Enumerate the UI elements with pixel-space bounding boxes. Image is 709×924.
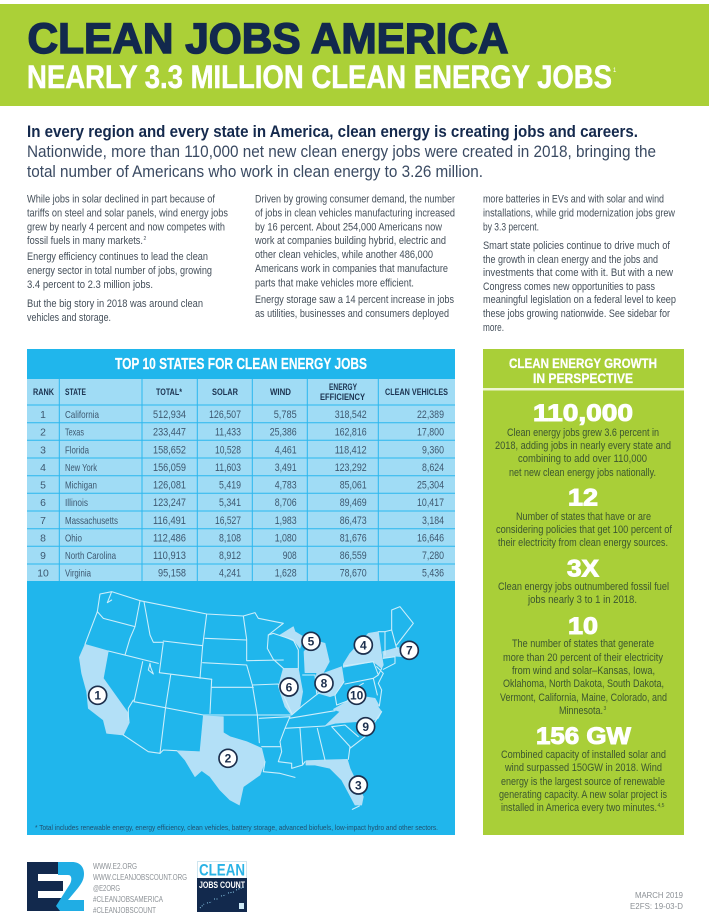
table rows: 4,241 [219,568,241,580]
table rows: 3,491 [275,462,297,474]
stat: 110,000: Clean energy jobs grew 3.6 percent in [507,427,659,439]
table rows: Illinois [65,498,88,509]
table rows: 6 [40,498,46,509]
intro text: In every region and every state in America, clean energy is creating jobs and careers. [27,123,638,141]
table rows: 7 [40,516,46,527]
stat: 110,000: combining to add over 110,000 [518,453,647,465]
stat: 156 GW [499,723,667,814]
table rows: 86,559 [340,550,367,562]
body column 1: But the big story in 2018 was around clean [27,298,203,310]
table rows: 9,360 [422,444,444,456]
table rows: 116,491 [153,515,186,527]
state number markers [89,632,418,794]
state number markers: 2 [225,752,232,766]
contact links: WWW.E2.ORG [93,861,137,871]
table rows: 2 [40,428,46,439]
table rows: 123,292 [335,462,367,474]
table rows: 1,983 [275,515,297,527]
stat: 110,000 [495,400,671,479]
body column 2 [254,194,455,320]
table rows: 5,436 [422,568,444,580]
table rows: 5,785 [274,409,297,421]
table rows: 10,528 [215,444,241,456]
logo: E2 [27,862,84,911]
state number markers: 1 [94,689,101,703]
state number markers: 9 [362,720,369,734]
title: CLEAN JOBS AMERICA [28,15,508,63]
body column 3: more. [483,322,504,334]
contact links: WWW.CLEANJOBSCOUNT.ORG [93,872,187,882]
header banner [0,4,709,106]
body column 1: tariffs on steel and solar panels, wind energy jobs [27,208,229,220]
body column 2: of jobs in clean vehicles manufacturing increased [255,208,455,220]
state number markers: 3 [355,778,362,792]
US map [79,592,418,809]
table rows: Ohio [65,533,82,544]
state number markers: 8 [321,677,328,691]
table rows [37,409,444,580]
table rows: North Carolina [65,551,116,562]
table rows: 95,158 [158,568,186,580]
intro text: total number of Americans who work in clean energy to 3.26 million. [27,163,483,181]
contact links: #CLEANJOBSAMERICA [93,894,163,904]
state number markers: 4 [360,638,367,652]
stat: 156 GW: 4,5 [658,803,665,809]
body column 2: other clean vehicles, while another 486,000 [255,249,433,261]
table rows: New York [65,463,98,474]
table rows: 16,646 [417,532,444,544]
stat: 156 GW: installed in America every two minutes. [501,802,657,814]
stat: 3X: 3X [567,556,599,583]
stat: 10: The number of states that generate [512,638,654,650]
date and document code [630,890,683,911]
table rows: 78,670 [340,568,367,580]
table rows: 156,059 [153,462,186,474]
table rows: 8,912 [219,550,241,562]
stat: 110,000: 110,000 [533,400,633,427]
table rows: 123,247 [153,497,186,509]
body column 2: by 16 percent. About 254,000 Americans now [255,222,442,234]
table header: EFFICIENCY [320,392,365,403]
table rows: 25,304 [417,480,444,492]
logo: clean jobs count: JOBS COUNT [199,880,245,891]
map footnote: * Total includes renewable energy, energy efficiency, clean vehicles, battery storage, advanced biofuels, low-impact hydro and other sectors. [35,823,438,832]
table rows: 10,417 [417,497,444,509]
body column 1: grew by nearly 4 percent and now competes with [27,222,225,234]
panel: top 10 states [27,349,455,835]
stat: 156 GW: 156 GW [536,723,631,750]
intro text [27,123,656,181]
stat: 10: more than 20 percent of their electricity [503,652,664,664]
table title: TOP 10 STATES FOR CLEAN ENERGY JOBS [115,356,367,373]
stat: 3X: Clean energy jobs outnumbered fossil fuel [498,581,669,593]
footnote mark: 1 [613,68,617,74]
subtitle: NEARLY 3.3 MILLION CLEAN ENERGY JOBS [27,59,612,95]
stat: 12: 12 [568,485,598,512]
stat: 110,000: net new clean energy jobs nationally. [509,467,656,479]
stat: 12: considering policies that get 100 percent of [496,524,673,536]
table rows: 3 [40,445,46,456]
state number markers: 10 [350,689,364,703]
state borders [85,592,413,809]
state number markers: 7 [406,644,413,658]
body column 2: Americans work in companies that manufacture [255,263,448,275]
table rows: 126,507 [209,409,241,421]
table rows: Florida [65,445,89,456]
table rows: 5 [40,480,46,492]
table rows: 11,433 [215,427,241,439]
table rows: 22,389 [417,409,444,421]
table rows: 110,913 [153,550,186,562]
intro text: Nationwide, more than 110,000 net new clean energy jobs were created in 2018, bringing the [27,143,656,161]
contact links: @E2ORG [93,883,120,893]
date and document code: MARCH 2019 [635,890,683,900]
table rows: 3,184 [422,515,444,527]
table header: TOTAL* [156,387,182,398]
table header [33,382,448,403]
table rows: Virginia [65,569,91,580]
table rows: 8 [40,533,46,544]
table rows: 8,706 [275,497,297,509]
table rows: 8,108 [219,532,241,544]
table rows: 85,061 [340,480,367,492]
table rows: California [65,410,99,421]
table rows: 7,280 [422,550,444,562]
body column 1: vehicles and storage. [27,312,111,324]
table rows: 162,816 [335,427,367,439]
sidebar heading: IN PERSPECTIVE [533,371,633,386]
stat: 10: 10 [568,613,598,640]
table header: CLEAN VEHICLES [385,387,448,398]
table rows: 5,341 [219,497,241,509]
body column 1: Energy efficiency continues to lead the clean [27,251,208,263]
table rows: 10 [37,569,49,580]
table rows: 1,080 [275,532,297,544]
state number markers: 6 [286,680,293,694]
table rows: 5,419 [219,480,241,492]
body column 2: parts that make vehicles more efficient. [255,278,414,290]
table rows: 25,386 [270,427,297,439]
stat: 156 GW: wind surpassed 150GW in 2018. Wind [504,762,662,774]
body column 3 [483,194,676,334]
stat: 156 GW: Combined capacity of installed solar and [501,749,666,761]
stat: 156 GW: generating capacity. A new solar project is [499,789,667,801]
body column 1: 3.4 percent to 2.3 million jobs. [27,279,153,291]
table header: RANK [33,387,54,398]
table rows: 17,800 [417,427,444,439]
contact links [93,861,187,915]
logo: clean jobs count: CLEAN [199,860,245,880]
stat: 12: their electricity from clean energy sources. [498,537,668,549]
stat: 10: 3 [604,706,606,712]
table rows: 8,624 [422,462,444,474]
body column 2: Energy storage saw a 14 percent increase in jobs [255,294,455,306]
stat: 10: Oklahoma, North Dakota, South Dakota, [503,678,664,690]
table rows: 126,081 [153,480,186,492]
table header: WIND [270,387,291,398]
contact links: #CLEANJOBSCOUNT [93,905,157,915]
table header: ENERGY [329,382,357,393]
body column 3: the growth in clean energy and the jobs and [483,254,658,266]
date and document code: E2FS: 19-03-D [630,901,683,911]
table rows: 89,469 [340,497,367,509]
stat: 12 [496,485,673,549]
stat: 12: Number of states that have or are [516,511,651,523]
body column 3: installations, while grid modernization jobs grew [483,208,675,220]
body column 1: energy sector in total number of jobs, growing [27,265,212,277]
table rows: Texas [65,428,84,439]
table rows: 1 [40,410,46,421]
table rows: Michigan [65,480,97,492]
body column 3: Smart state policies continue to drive much of [483,240,671,252]
table rows: 908 [283,550,297,562]
table rows: 4,461 [275,444,297,456]
body column 2: as utilities, businesses and consumers deployed [255,308,449,320]
state number markers: 5 [308,635,315,649]
stat: 10: from wind and solar–Kansas, Iowa, [512,665,655,677]
body column 1 [27,194,229,324]
panel: clean energy growth in perspective [483,349,684,835]
stat: 10: Minnesota. [559,705,603,717]
table rows: 16,527 [215,515,241,527]
table rows: 4,783 [275,480,297,492]
table rows: 158,652 [153,444,186,456]
body column 1: fossil fuels in many markets. [27,235,143,247]
sidebar heading [509,356,657,386]
body column 3: investments that come with it. But with a new [483,267,673,279]
table header: SOLAR [212,387,238,398]
logo: clean jobs count [197,860,247,912]
body column 2: Driven by growing consumer demand, the number [255,194,455,206]
body column 3: more batteries in EVs and with solar and wind [483,194,664,206]
stat: 10: Vermont, California, Maine, Colorado, and [500,692,667,704]
body column 1: While jobs in solar declined in part because of [27,194,216,206]
body column 3: these jobs growing nationwide. See sidebar for [483,308,670,320]
table rows: 9 [40,551,46,562]
stat: 110,000: 2018, adding jobs in nearly every state and [495,440,671,452]
body column 3: Congress comes new opportunities to pass [483,281,655,293]
stat: 10 [500,613,667,717]
body column 3: by 3.3 percent. [483,222,539,234]
table rows: 318,542 [335,409,367,421]
table rows: 81,676 [340,532,367,544]
table rows: 118,412 [335,444,367,456]
table rows: 11,603 [215,462,241,474]
sidebar heading: CLEAN ENERGY GROWTH [509,356,657,371]
stat: 156 GW: energy is the largest source of renewable [501,776,665,788]
body column 1: 2 [144,236,146,242]
stat: 3X: jobs nearly 3 to 1 in 2018. [527,594,637,606]
table rows: 1,628 [275,568,297,580]
body column 2: work at companies building hybrid, electric and [254,235,446,247]
table rows: 4 [40,463,46,474]
table rows: 86,473 [340,515,367,527]
stat: 3X [498,556,669,606]
table rows: Massachusetts [65,516,118,527]
body column 3: meaningful legislation on a federal level to keep [483,294,676,306]
table header: STATE [65,387,86,398]
highlighted states [79,627,402,805]
table [27,379,455,581]
table rows: 512,934 [153,409,186,421]
table rows: 112,486 [153,532,186,544]
table rows: 233,447 [153,427,186,439]
